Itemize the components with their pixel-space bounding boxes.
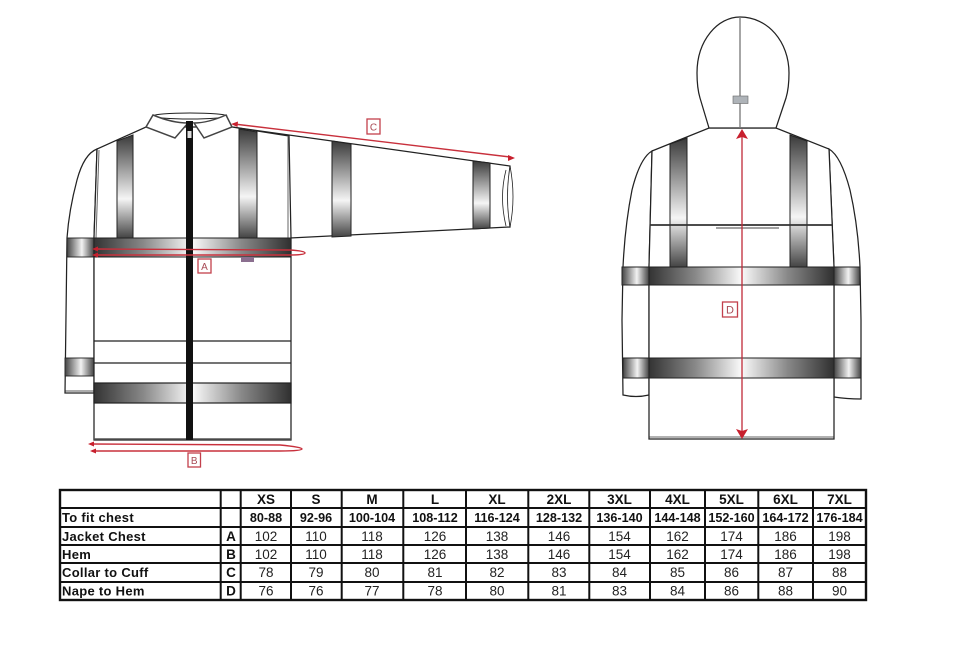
row: collar to cuff: 83 (551, 565, 567, 580)
collar (146, 113, 232, 138)
sleeves (622, 149, 861, 399)
row: jacket chest: 102 (255, 529, 277, 544)
cuff reflective band (473, 161, 490, 229)
row: nape to hem (62, 584, 847, 598)
size header row: 5XL (719, 492, 744, 507)
row: jacket chest: 162 (666, 529, 689, 544)
row: hem: 126 (424, 547, 446, 562)
back view of jacket (622, 17, 861, 439)
row: to fit chest: To fit chest (62, 510, 134, 525)
row: to fit chest: 152-160 (708, 511, 755, 525)
row: collar to cuff: C (226, 565, 236, 580)
row: jacket chest (62, 529, 851, 544)
size table (60, 490, 866, 600)
row: to fit chest: 144-148 (654, 511, 701, 525)
size header row (257, 492, 852, 507)
row: to fit chest: 128-132 (536, 511, 582, 525)
row: hem: 146 (548, 547, 570, 562)
measurement C: collar to cuff (231, 119, 515, 161)
row: nape to hem: 77 (364, 584, 380, 598)
row: nape to hem: 78 (427, 584, 443, 598)
row: nape to hem: 83 (612, 584, 627, 598)
row: nape to hem: 90 (832, 584, 847, 598)
size header row: 7XL (827, 492, 852, 507)
extended sleeve (232, 127, 513, 238)
row: jacket chest: 154 (608, 529, 631, 544)
size header row: 3XL (607, 492, 632, 507)
shoulder stripe left (117, 135, 133, 238)
row: jacket chest: Jacket Chest (62, 529, 146, 544)
row: jacket chest: 198 (828, 529, 851, 544)
row: nape to hem: Nape to Hem (62, 584, 145, 598)
shoulder stripe right (239, 129, 257, 238)
row: jacket chest: 186 (774, 529, 797, 544)
measurement C: collar to cuff: C (370, 122, 377, 134)
hem reflective band (94, 383, 291, 403)
shoulder stripe right (790, 135, 807, 267)
row: collar to cuff: 88 (832, 565, 847, 580)
row: collar to cuff: 84 (612, 565, 627, 580)
size header row: 2XL (547, 492, 571, 507)
row: to fit chest: 136-140 (596, 511, 643, 525)
row: nape to hem: 76 (308, 584, 324, 598)
measurement D: nape to hem (722, 129, 748, 439)
hood (697, 17, 789, 128)
sleeve opening (502, 166, 513, 227)
pocket flap lines (94, 341, 291, 363)
size header row: M (366, 492, 378, 507)
upper reflective band (649, 267, 834, 285)
row: nape to hem: 81 (551, 584, 567, 598)
size tag (241, 257, 254, 262)
row: to fit chest (62, 510, 863, 525)
hood toggle (733, 96, 748, 104)
row: collar to cuff: 78 (258, 565, 274, 580)
table grid (60, 490, 866, 600)
size header row: 4XL (665, 492, 690, 507)
row: hem: 154 (608, 547, 631, 562)
row: hem: 174 (720, 547, 743, 562)
chest reflective band (94, 238, 291, 257)
row: collar to cuff: 81 (427, 565, 443, 580)
row: jacket chest: 110 (305, 529, 327, 544)
front zipper (186, 121, 193, 440)
row: to fit chest: 164-172 (762, 511, 809, 525)
measurement D: nape to hem: D (726, 304, 734, 316)
measurement A: jacket chest (92, 246, 305, 273)
front view of jacket (65, 113, 513, 440)
row: hem: 162 (666, 547, 689, 562)
row: nape to hem: 80 (489, 584, 505, 598)
sleeve reflective band (332, 141, 351, 237)
row: hem: 198 (828, 547, 851, 562)
row: hem: 110 (305, 547, 327, 562)
lower reflective band (649, 358, 834, 378)
size header row: 6XL (773, 492, 798, 507)
row: hem: 138 (486, 547, 508, 562)
size header row: XL (488, 492, 506, 507)
left sleeve (65, 149, 97, 393)
yoke line and pocket zip (650, 224, 832, 226)
row: jacket chest: 174 (720, 529, 743, 544)
measurement B: hem (88, 442, 302, 467)
measurement B: hem: B (191, 456, 198, 467)
jacket body (94, 127, 291, 440)
row: nape to hem: 76 (258, 584, 274, 598)
row: jacket chest: A (226, 529, 236, 544)
row: collar to cuff: 79 (308, 565, 324, 580)
row: nape to hem: 86 (724, 584, 739, 598)
row: jacket chest: 138 (486, 529, 508, 544)
row: collar to cuff (62, 565, 847, 580)
row: nape to hem: 84 (670, 584, 685, 598)
row: collar to cuff: 87 (778, 565, 793, 580)
row: jacket chest: 118 (361, 529, 383, 544)
jacket body (622, 128, 861, 439)
row: collar to cuff: 85 (670, 565, 685, 580)
row: to fit chest: 108-112 (412, 511, 458, 525)
row: hem: Hem (62, 547, 91, 562)
row: to fit chest: 176-184 (816, 511, 863, 525)
size header row: S (311, 492, 321, 507)
row: nape to hem: 88 (778, 584, 793, 598)
row: to fit chest: 80-88 (250, 511, 282, 525)
row: jacket chest: 146 (548, 529, 570, 544)
row: collar to cuff: 80 (364, 565, 380, 580)
size header row: XS (257, 492, 275, 507)
row: collar to cuff: 82 (489, 565, 505, 580)
measurement A: jacket chest: A (201, 262, 208, 273)
row: hem (62, 547, 851, 562)
size header row: L (431, 492, 439, 507)
row: collar to cuff: 86 (724, 565, 739, 580)
row: jacket chest: 126 (424, 529, 446, 544)
row: nape to hem: D (226, 584, 236, 598)
row: to fit chest: 92-96 (300, 511, 332, 525)
row: hem: B (226, 547, 236, 562)
row: hem: 102 (255, 547, 277, 562)
row: to fit chest: 100-104 (349, 511, 395, 525)
row: to fit chest: 116-124 (474, 511, 520, 525)
row: hem: 118 (361, 547, 383, 562)
row: hem: 186 (774, 547, 797, 562)
row: collar to cuff: Collar to Cuff (62, 565, 149, 580)
shoulder stripe left (670, 138, 687, 267)
